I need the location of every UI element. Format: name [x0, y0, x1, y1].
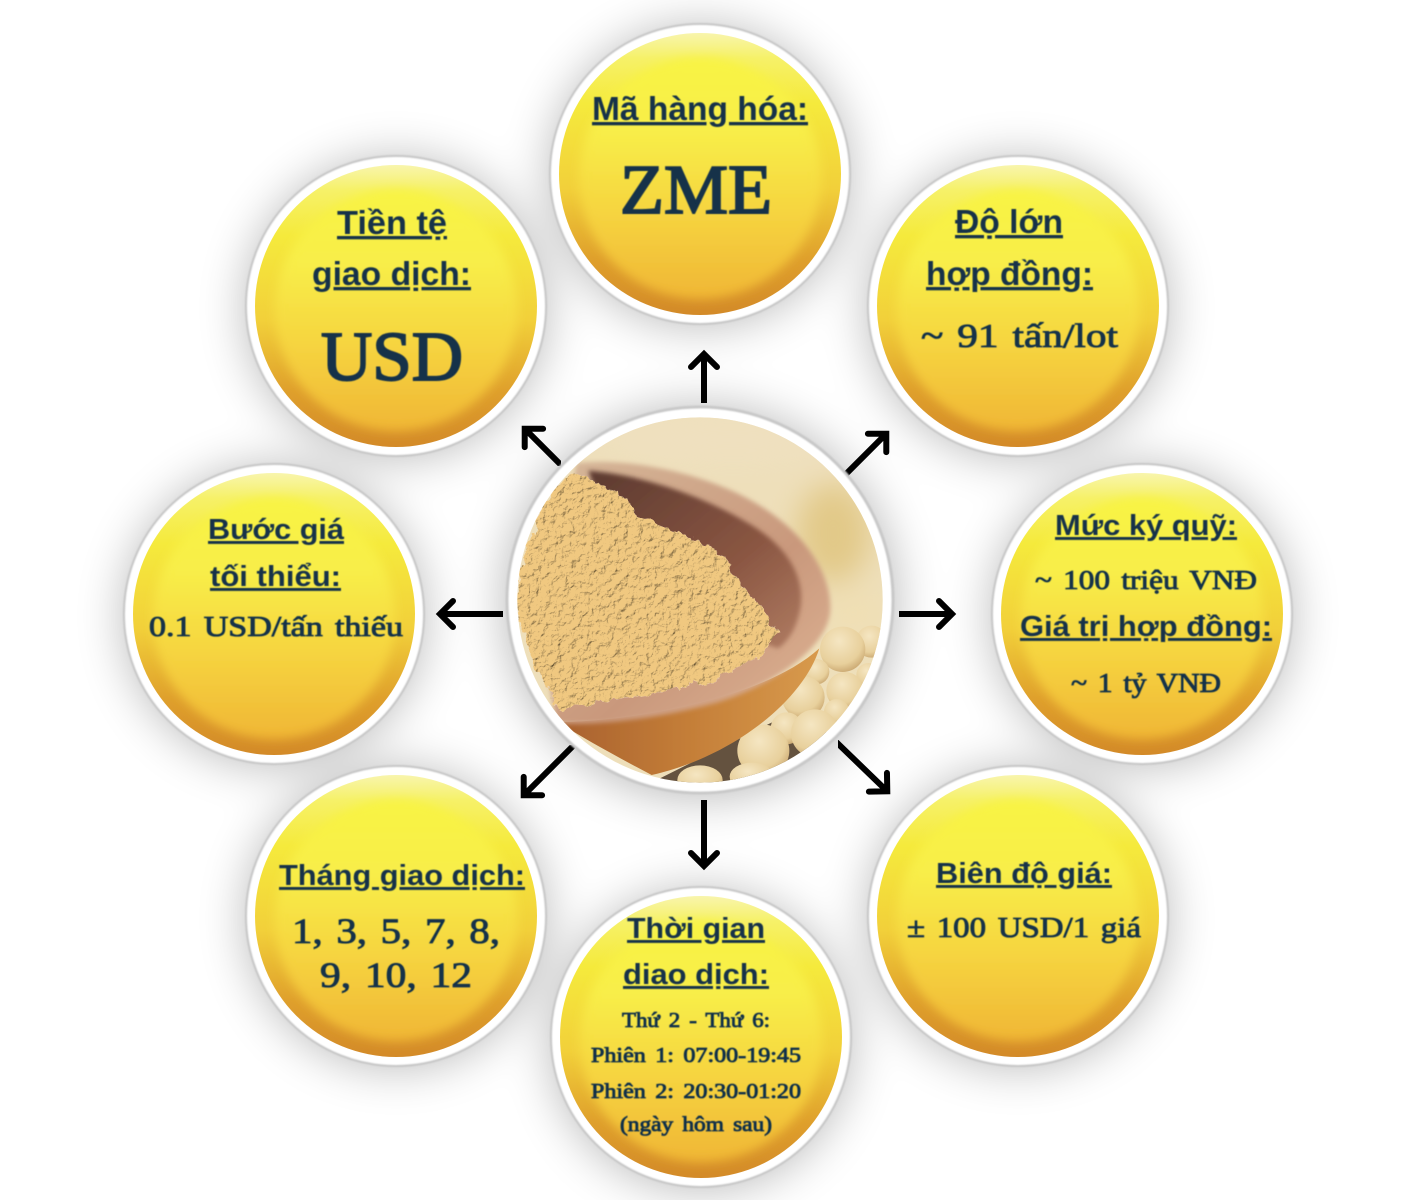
text: currency: giao dịch:	[312, 255, 471, 292]
bubble: margin and contract value	[992, 464, 1292, 764]
powder	[513, 472, 778, 711]
bowl interior	[588, 471, 801, 648]
text: trading hours: Phiên 2: 20:30-01:20	[591, 1079, 801, 1103]
text: trading months: 1, 3, 5, 7, 8,	[292, 911, 500, 951]
bowl rim	[540, 462, 830, 724]
text: all bubble labels	[149, 90, 1272, 1136]
text: commodity code: Mã hàng hóa:	[592, 90, 808, 127]
text: trading months	[279, 860, 525, 995]
arrow: bottom left	[520, 745, 575, 798]
text: commodity code: ZME	[620, 152, 772, 229]
text: price limit: ± 100 USD/1 giá	[907, 912, 1141, 944]
central photo: soybean powder in wooden bowl	[500, 400, 900, 800]
arrow: right	[899, 598, 956, 630]
text: trading hours: (ngày hôm sau)	[620, 1112, 772, 1136]
text: price limit	[907, 858, 1141, 944]
text: trading hours: Thứ 2 - Thứ 6:	[622, 1008, 770, 1032]
text: contract size: ~ 91 tấn/lot	[921, 318, 1119, 355]
arrow: top left	[522, 426, 561, 466]
text: trading hours: Thời gian	[627, 913, 765, 945]
text: currency	[312, 204, 471, 396]
arrow: bottom right	[838, 740, 890, 795]
bubble: trading hours	[551, 887, 851, 1187]
text: currency: Tiền tệ	[337, 204, 447, 241]
text: currency: USD	[321, 319, 463, 396]
arrow: bottom	[688, 800, 720, 870]
bowl exterior	[557, 648, 819, 775]
text: contract size: Độ lớn	[955, 203, 1063, 240]
bubble: contract size	[868, 156, 1168, 456]
text: trading months: 9, 10, 12	[320, 955, 472, 995]
text: margin and contract value: ~ 1 tỷ VNĐ	[1071, 668, 1221, 698]
text: margin and contract value	[1020, 510, 1272, 698]
text: margin and contract value: Mức ký quỹ:	[1055, 510, 1237, 542]
text: contract size: hợp đồng:	[926, 255, 1093, 292]
bubble: currency	[246, 156, 546, 456]
beans	[677, 626, 880, 782]
text: minimum tick: tối thiểu:	[210, 561, 341, 593]
text: trading months: Tháng giao dịch:	[279, 860, 525, 892]
text: minimum tick: Bước giá	[208, 514, 345, 546]
text: margin and contract value: Giá trị hợp đồng:	[1020, 611, 1272, 643]
arrow: top	[688, 350, 720, 403]
bubble: price limit	[868, 766, 1168, 1066]
text: trading hours	[591, 913, 801, 1136]
arrow: left	[436, 598, 503, 630]
bubble: trading months	[246, 766, 546, 1066]
text: trading hours: Phiên 1: 07:00-19:45	[591, 1043, 801, 1067]
text: trading hours: diao dịch:	[623, 959, 769, 991]
arrow: top right	[844, 430, 890, 476]
burlap	[660, 722, 826, 783]
text: contract size	[921, 203, 1119, 355]
text: minimum tick	[149, 514, 403, 643]
text: minimum tick: 0.1 USD/tấn thiếu	[149, 612, 403, 643]
text: commodity code	[592, 90, 808, 229]
bubble: minimum tick	[124, 464, 424, 764]
bubble: commodity code	[550, 24, 850, 324]
text: price limit: Biên độ giá:	[936, 858, 1112, 890]
text: margin and contract value: ~ 100 triệu VNĐ	[1035, 565, 1257, 595]
